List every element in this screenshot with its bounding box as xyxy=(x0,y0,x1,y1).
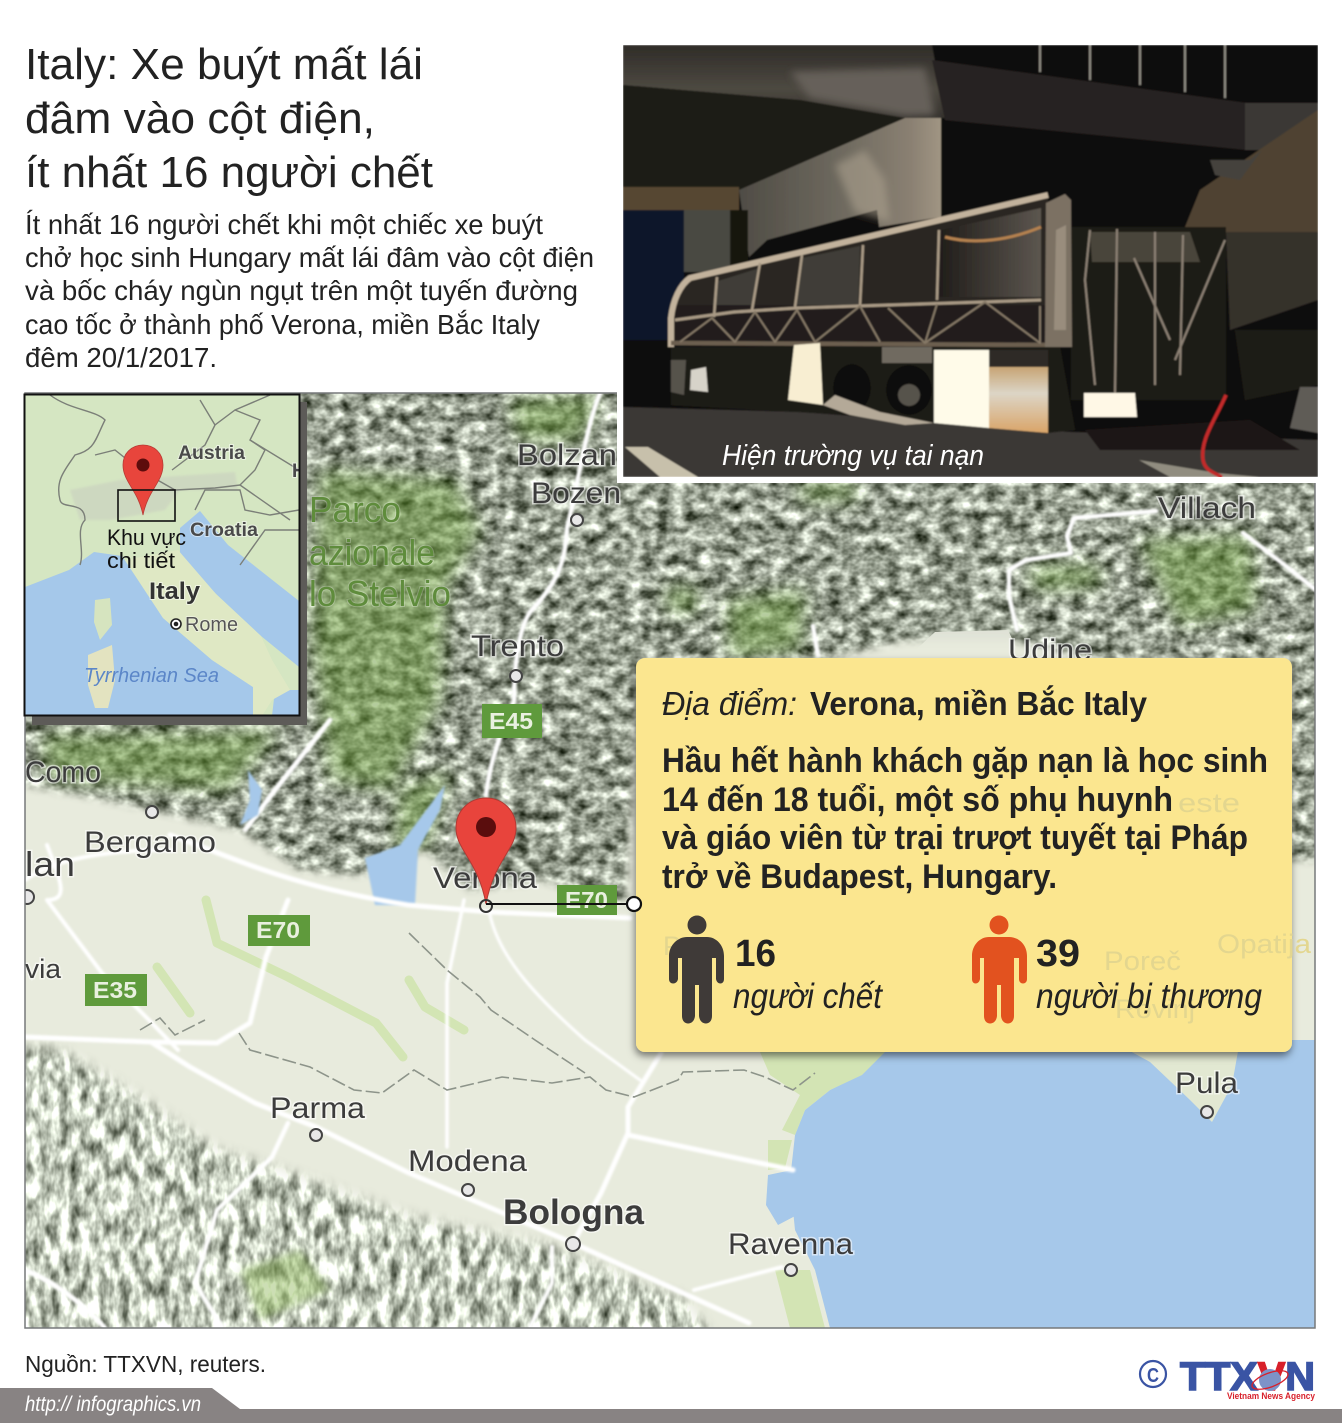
faded labels under panel xyxy=(663,788,1312,1024)
map labels: Pula xyxy=(1175,1067,1238,1100)
map labels: Parma xyxy=(270,1092,365,1125)
map labels: Bergamo xyxy=(84,826,216,859)
road shields: E70 xyxy=(256,917,300,943)
concrete pier xyxy=(739,118,941,257)
bus frame xyxy=(671,195,1225,395)
bus interior xyxy=(678,199,1050,306)
inset sea xyxy=(25,511,299,716)
detail area box xyxy=(118,490,175,521)
faded labels under panel: Opatija xyxy=(1217,929,1312,959)
location line: Địa điểm: xyxy=(662,685,797,722)
map labels: azionale xyxy=(309,532,435,573)
logo TTXVN: TTXVN xyxy=(1180,1355,1315,1399)
intro text: và bốc cháy ngùn ngụt trên một tuyến đường xyxy=(25,275,578,306)
Adriatic sea xyxy=(790,1040,1315,1328)
lakes xyxy=(239,770,446,906)
title: đâm vào cột điện, xyxy=(25,94,375,143)
map labels: Ravenna xyxy=(728,1228,853,1261)
description: trở về Budapest, Hungary. xyxy=(662,858,1057,896)
road shields: E70 xyxy=(565,887,608,913)
map labels: lan xyxy=(25,846,75,884)
locator inset map: Rome xyxy=(185,614,238,636)
road xyxy=(623,407,1318,477)
title: ít nhất 16 người chết xyxy=(25,148,433,197)
intro text: Ít nhất 16 người chết khi một chiếc xe buýt xyxy=(25,209,543,240)
map labels: Modena xyxy=(408,1145,527,1178)
plains roads xyxy=(25,835,793,1328)
locator inset map: Khu vực xyxy=(107,525,186,550)
logo TTXVN: Vietnam News Agency xyxy=(1227,1391,1316,1402)
dead count: 16 xyxy=(735,933,776,975)
faded labels under panel: P xyxy=(663,931,681,961)
map labels: Bologna xyxy=(503,1193,645,1232)
icon: person orange xyxy=(972,916,1027,1024)
icon: person dark xyxy=(669,916,724,1024)
faded labels under panel: Poreč xyxy=(1104,946,1181,976)
inset pin xyxy=(123,445,163,515)
map labels: lo Stelvio xyxy=(309,573,451,614)
green river ribbons xyxy=(157,900,464,1057)
map frame xyxy=(25,393,1315,1328)
mountain roads xyxy=(245,393,1316,830)
inset labels: Croatia xyxy=(190,520,258,541)
map labels: Villach xyxy=(1158,492,1256,525)
info panel: người bị thương xyxy=(1036,977,1262,1016)
wheels xyxy=(833,364,871,405)
inset Italy tint xyxy=(125,550,290,716)
map labels: Bozen xyxy=(531,477,621,510)
provincial borders xyxy=(140,933,815,1097)
locator inset map xyxy=(24,394,307,725)
lower beam and column xyxy=(623,187,739,210)
description: 14 đến 18 tuổi, một số phụ huynh xyxy=(662,781,1173,819)
map labels: via xyxy=(25,954,62,984)
source: Nguồn: TTXVN, reuters. xyxy=(25,1351,266,1377)
pale ridges near Udine xyxy=(922,630,1012,646)
info panel: Verona, miền Bắc Italy xyxy=(810,685,1148,722)
intro text: chở học sinh Hungary mất lái đâm vào cột điện xyxy=(25,242,594,273)
bridge railing xyxy=(1040,45,1225,98)
description xyxy=(662,742,1268,896)
injured count: 39 xyxy=(1036,933,1080,975)
lower body xyxy=(671,347,1075,433)
map labels: Udine xyxy=(1008,634,1092,667)
Istria xyxy=(1132,1052,1238,1122)
Apennine foothills xyxy=(25,1040,725,1330)
Alpine mountains xyxy=(25,393,1316,928)
inset islands xyxy=(94,598,112,640)
road shields xyxy=(85,704,617,1006)
title: Italy: Xe buýt mất lái xyxy=(25,40,423,89)
locator inset map: chi tiết xyxy=(107,548,175,573)
faded labels under panel: este xyxy=(1178,788,1240,818)
cab and front xyxy=(1071,193,1182,227)
hose xyxy=(1203,395,1226,477)
map labels: Bolzan xyxy=(517,439,617,472)
map labels xyxy=(25,439,1256,1261)
inset labels: Italy xyxy=(149,578,201,605)
forest patches xyxy=(40,395,1256,850)
description: Hầu hết hành khách gặp nạn là học sinh xyxy=(662,742,1268,780)
lagoon xyxy=(766,1170,794,1225)
map labels: Trento xyxy=(471,630,564,663)
Tyrrhenian corner xyxy=(25,1290,80,1328)
title xyxy=(25,40,433,197)
road shields: E45 xyxy=(489,708,533,734)
slope xyxy=(1183,110,1318,232)
intro text: đêm 20/1/2017. xyxy=(25,342,217,373)
description: và giáo viên từ trại trượt tuyết tại Pháp xyxy=(662,819,1248,857)
map labels: Como xyxy=(25,756,101,789)
Alpine tint xyxy=(70,472,238,520)
map labels: Parco xyxy=(309,489,401,530)
footer bar xyxy=(0,1388,1342,1423)
road shields: E35 xyxy=(93,977,137,1003)
accident photo xyxy=(617,39,1324,483)
inset borders xyxy=(50,395,299,565)
coastal wetlands xyxy=(760,1052,885,1328)
map labels: Verona xyxy=(433,862,537,895)
logo TTXVN: C xyxy=(1147,1365,1159,1387)
bridge deck xyxy=(623,45,945,118)
inset labels: H xyxy=(292,461,306,482)
faded labels under panel: Rovinj xyxy=(1115,994,1195,1024)
inset labels: Austria xyxy=(178,443,245,464)
Verona pin and connector xyxy=(456,798,641,912)
inset labels xyxy=(149,443,306,605)
map of northern Italy xyxy=(20,393,1316,1330)
info panel xyxy=(636,658,1312,1052)
footer bar: http:// infographics.vn xyxy=(25,1393,201,1416)
intro text: cao tốc ở thành phố Verona, miền Bắc Italy xyxy=(25,309,540,340)
photo caption: Hiện trường vụ tai nạn xyxy=(722,440,984,472)
intro text xyxy=(25,209,594,373)
info panel: người chết xyxy=(733,977,883,1016)
locator inset map: Tyrrhenian Sea xyxy=(84,665,219,687)
city markers xyxy=(20,514,1213,1276)
rear pillar xyxy=(1045,194,1072,347)
